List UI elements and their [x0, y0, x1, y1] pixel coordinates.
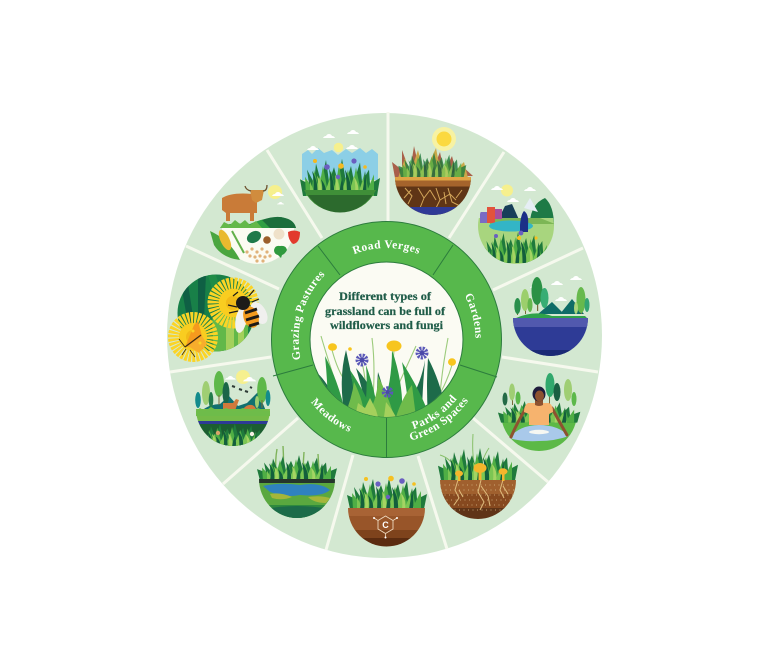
- centre text: grassland can be full of: [325, 305, 445, 318]
- label: Gardens: Gardens: [466, 294, 482, 338]
- wildflower meadow illustration: [314, 336, 462, 417]
- illustration: carbon stored in soil: [347, 476, 427, 547]
- blue cornflowers: [358, 350, 426, 395]
- illustration: fungi in soil: [438, 434, 518, 520]
- label: Parks and: Parks and: [411, 394, 457, 430]
- illustration: highland cow and food: [210, 185, 300, 264]
- grassland benefits wheel: [167, 112, 602, 558]
- butterfly: [179, 321, 207, 357]
- label: Road Verges: Road Verges: [352, 240, 420, 254]
- illustration: urban park with lake: [478, 184, 555, 268]
- carbon molecule icon: C: [382, 520, 389, 530]
- centre panel with text and wildflowers: [310, 262, 463, 417]
- deer: [223, 399, 257, 414]
- label: Green Spaces: Green Spaces: [410, 398, 468, 440]
- bee: [228, 290, 271, 334]
- illustration: lake with trees and hills: [513, 276, 590, 358]
- label: Meadows: Meadows: [310, 397, 351, 432]
- illustration: wildflower road verge with sky: [300, 130, 380, 213]
- outer pale green disc with segment dividers: [167, 112, 602, 558]
- illustration: deer in meadow: [195, 370, 270, 448]
- centre text: Different types of: [339, 290, 431, 303]
- centre text: wildflowers and fungi: [330, 319, 444, 332]
- yellow buttercups: [328, 340, 456, 366]
- illustration: wetland with blue water: [257, 446, 337, 520]
- central ring with grassland type labels: [271, 221, 502, 458]
- illustration: person meditating among trees: [498, 373, 580, 452]
- label: Grazing Pastures: Grazing Pastures: [291, 272, 324, 360]
- illustration: bee and butterfly on dandelions: [175, 274, 271, 357]
- illustration: soil with roots and sun: [392, 127, 473, 217]
